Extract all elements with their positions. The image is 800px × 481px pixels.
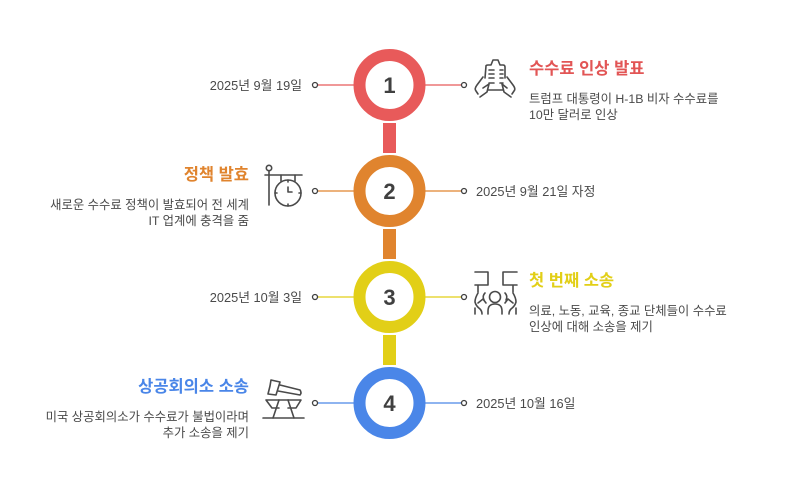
step 4 node: 4 [383,391,396,416]
step 3 node [312,267,466,327]
description: step 4: 미국 상공회의소가 수수료가 불법이라며 [46,410,249,424]
description: step 1 [529,92,718,122]
date 2: 2025년 9월 21일 자정 [476,184,595,199]
description: step 3: 인상에 대해 소송을 제기 [529,320,653,334]
description: step 1: 10만 달러로 인상 [529,108,618,122]
date 1: 2025년 9월 19일 [210,78,302,93]
description: step 3 [529,304,727,334]
step 1 node: 1 [383,73,396,98]
description: step 2 [50,197,249,228]
heading: step 4: 상공회의소 소송 [138,377,249,396]
description: step 2: 새로운 수수료 정책이 발효되어 전 세계 [50,197,249,212]
step 2 node: 2 [383,179,396,204]
description: step 3: 의료, 노동, 교육, 종교 단체들이 수수료 [529,304,727,318]
step 2 node [312,161,466,221]
step 3 node: 3 [383,285,396,310]
connector 2 to 3 [383,229,396,259]
description: step 4 [46,410,249,440]
icon: hands holding document [475,60,515,97]
step 1 node [312,55,466,115]
connector 3 to 4 [383,335,396,365]
step 4 node [312,373,466,433]
heading: step 2: 정책 발효 [184,165,249,184]
description: step 4: 추가 소송을 제기 [163,426,249,440]
connector 1 to 2 [383,123,396,153]
date 3: 2025년 10월 3일 [210,290,302,305]
heading: step 1: 수수료 인상 발표 [529,59,644,78]
heading: step 3: 첫 번째 소송 [529,271,614,290]
icon: hanging clock [265,165,302,206]
date 4: 2025년 10월 16일 [476,396,575,411]
description: step 1: 트럼프 대통령이 H-1B 비자 수수료를 [529,92,718,106]
description: step 2: IT 업계에 충격을 줌 [148,214,249,228]
icon: people raising signs [475,272,517,314]
icon: gavel and anvil [263,380,304,418]
